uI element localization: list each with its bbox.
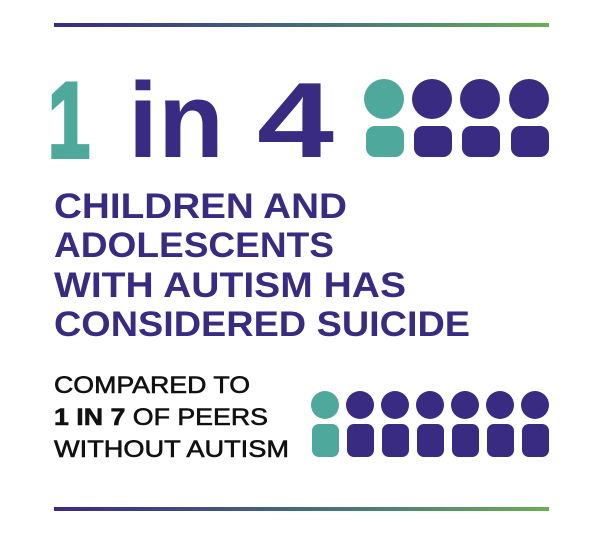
comparison text: COMPARED TO (54, 372, 250, 399)
comparison text (54, 372, 289, 463)
headline stat: 1 in 4: in (128, 60, 224, 180)
headline stat: 1 in 4: 4 (257, 60, 334, 180)
main statement text: CONSIDERED SUICIDE (54, 305, 470, 344)
icon: 4 people, 1 highlighted (364, 79, 549, 157)
headline stat: 1 in 4: 1 (48, 60, 90, 180)
icon: 7 people, 1 highlighted (311, 391, 549, 457)
main statement text: CHILDREN AND (54, 187, 347, 226)
headline stat: 1 in 4 (48, 60, 334, 180)
comparison text: WITHOUT AUTISM (54, 436, 289, 463)
comparison text: 1 IN 7 OF PEERS (54, 404, 268, 431)
main statement text: ADOLESCENTS (54, 226, 334, 265)
main statement text (54, 187, 470, 344)
main statement text: WITH AUTISM HAS (54, 266, 406, 305)
